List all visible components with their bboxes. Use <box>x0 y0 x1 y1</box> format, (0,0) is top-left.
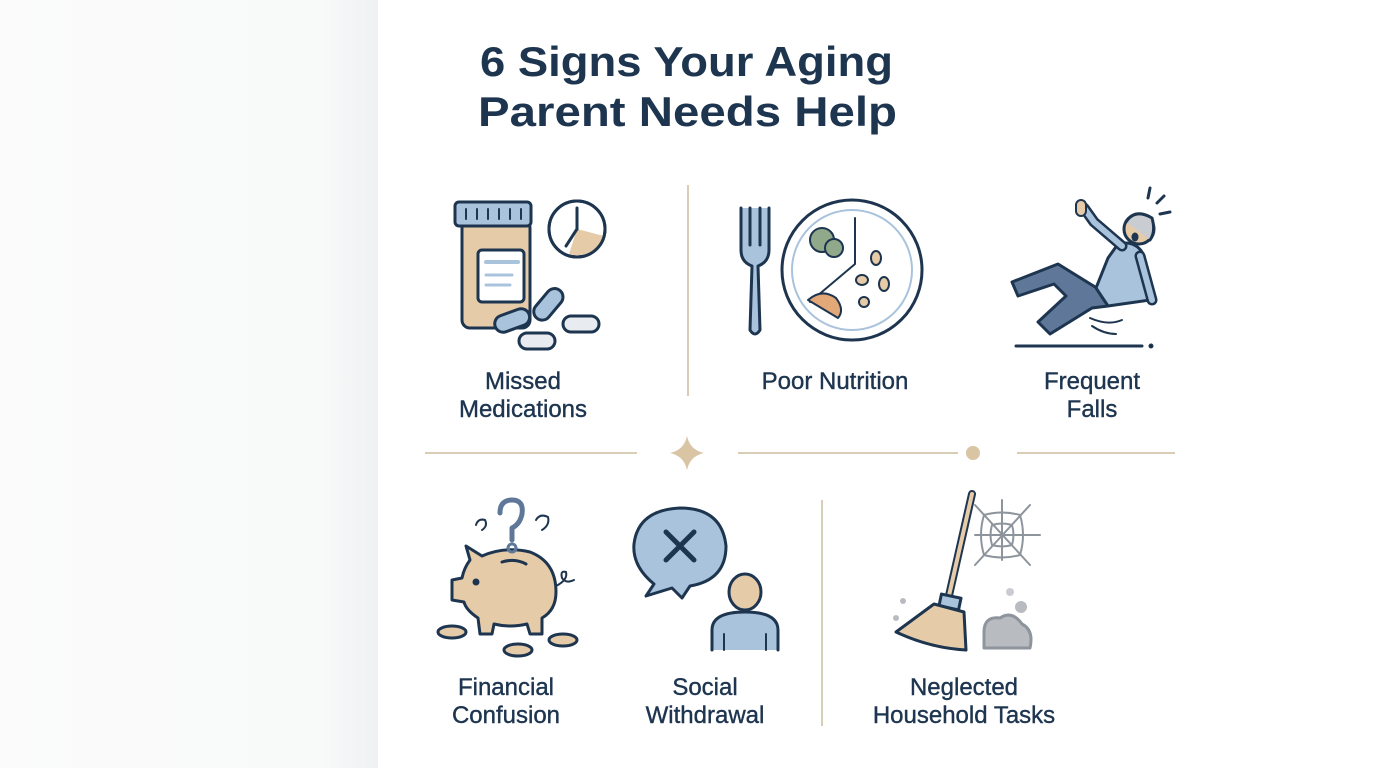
divider dot <box>966 446 980 460</box>
labels: Missed <box>485 368 561 395</box>
icon: pill bottle and clock <box>455 201 605 349</box>
labels: Frequent <box>1044 368 1140 395</box>
labels: Financial <box>458 674 554 701</box>
labels: Medications <box>459 396 587 423</box>
icon: fork and plate <box>741 200 922 340</box>
labels: Falls <box>1067 396 1117 423</box>
labels: Neglected <box>910 674 1018 701</box>
title <box>478 38 897 135</box>
labels <box>452 368 1140 729</box>
title: Parent Needs Help <box>478 88 897 135</box>
title: 6 Signs Your Aging <box>480 38 893 85</box>
labels: Withdrawal <box>646 702 764 729</box>
icon: speech bubble and person <box>634 508 778 650</box>
labels: Social <box>672 674 738 701</box>
icon: piggy bank <box>438 500 577 656</box>
labels: Poor Nutrition <box>762 368 908 395</box>
icon: broom and cobweb <box>893 494 1040 650</box>
labels: Confusion <box>452 702 560 729</box>
divider star <box>670 436 704 470</box>
left side panel <box>0 0 378 768</box>
labels: Household Tasks <box>873 702 1055 729</box>
icon: person falling <box>1012 188 1170 347</box>
